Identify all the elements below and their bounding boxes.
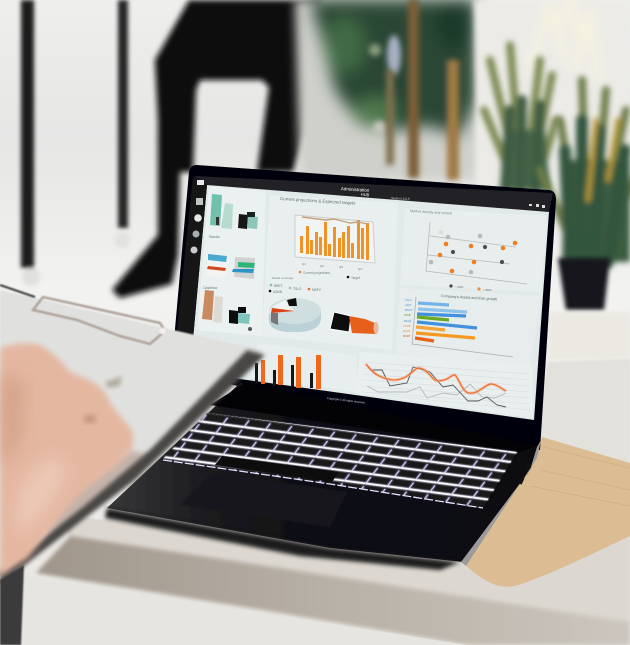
hand	[0, 343, 133, 578]
laptop screen	[176, 176, 553, 420]
chart axis labels: Q3	[339, 265, 343, 269]
3d pie chart	[269, 298, 321, 332]
scatter points orange	[438, 241, 517, 273]
clipboard and hand	[0, 285, 265, 645]
bar labels: ETHR	[403, 329, 410, 333]
gear icon	[248, 327, 252, 331]
chart legend	[299, 271, 360, 280]
clipboard top dark line	[0, 285, 35, 297]
hand base	[0, 343, 133, 578]
bar labels: TSLO	[405, 298, 412, 302]
orange series	[366, 364, 506, 393]
clipboard lower reflection strip	[40, 450, 150, 545]
laptop	[105, 165, 556, 570]
storage label: Stacks	[209, 235, 220, 239]
window poles	[21, 0, 130, 286]
panel: assets horizontal bar chart	[396, 288, 541, 368]
chart axis labels: Q4	[358, 267, 362, 271]
side edge with ports	[461, 440, 541, 566]
panel: storage widgets	[197, 186, 266, 336]
envelope	[463, 437, 630, 587]
teal stacks	[210, 194, 258, 229]
finger crease	[84, 415, 96, 423]
blurred background objects	[21, 0, 630, 360]
right floor strip	[548, 312, 630, 360]
panel: line chart	[356, 352, 533, 418]
clipboard sheet	[0, 290, 262, 575]
hub label: HUB	[361, 192, 370, 197]
desk top surface front	[60, 515, 630, 624]
pale leaves	[530, 0, 598, 80]
clipboard dark edge	[0, 350, 265, 585]
plant backdrop	[295, 0, 476, 180]
grid lines	[362, 362, 530, 410]
bar labels	[403, 298, 413, 338]
plant highlights	[369, 35, 401, 135]
bar labels: STAB	[404, 313, 411, 317]
chart heading: Current projections & Expected targets	[280, 196, 356, 206]
plant pot	[558, 258, 610, 310]
clipboard metal clip	[33, 297, 165, 344]
workflow label: Cashflow	[203, 286, 218, 290]
dark series	[370, 367, 506, 407]
footer copyright: Copyright © All rights reserved	[327, 396, 365, 405]
title bar	[194, 176, 553, 212]
right plant clump two	[540, 80, 630, 262]
panel: lower bars	[250, 343, 358, 392]
lit lower edge	[163, 460, 483, 508]
seated person silhouette	[112, 0, 322, 298]
bar chart heading: Company's Assets and their growth	[441, 294, 497, 301]
spacebar	[215, 456, 339, 482]
bar labels: MURT	[403, 334, 411, 338]
divider labels: Model coverage	[272, 276, 294, 280]
dashboard display	[190, 185, 549, 420]
lower bar chart	[255, 355, 321, 389]
dark foreground pole	[0, 565, 24, 645]
trackpad	[180, 473, 347, 527]
title bar label: Administration	[341, 186, 370, 193]
pie legend: TSLO	[293, 287, 302, 291]
scatter axes	[426, 222, 527, 284]
scatter legend: > 60%	[455, 285, 464, 289]
bar labels: AAVT	[405, 303, 412, 307]
coloured blocks	[207, 254, 255, 279]
scatter points grey	[429, 230, 482, 274]
scatter heading: Market density and control	[410, 209, 452, 216]
orange and black stacks	[202, 290, 250, 324]
chart axis labels: Q1	[302, 262, 306, 266]
orange bar chart	[300, 220, 369, 260]
target line	[302, 217, 367, 224]
floor under desk	[20, 575, 467, 645]
keyboard glow	[162, 413, 517, 508]
bar labels: COOK	[403, 324, 411, 328]
chart legend: Target	[351, 276, 360, 280]
pen tip	[105, 376, 122, 388]
deck shadow edge	[105, 508, 460, 570]
pie legend: AZMN	[273, 290, 283, 294]
panel: current projections	[262, 195, 398, 350]
knuckle shadows	[0, 375, 25, 470]
3d cylinder chart	[330, 312, 378, 334]
right plant clump one	[484, 45, 556, 190]
version label: Version 3.0.5	[391, 196, 410, 201]
desk front face	[36, 536, 630, 645]
backlit keyboard	[162, 413, 517, 508]
scatter legend: > 85%	[483, 288, 492, 292]
clip rivet	[160, 328, 166, 334]
centre plant	[295, 0, 476, 180]
panel: market density scatter	[400, 208, 547, 292]
bar labels: MGUV	[405, 308, 413, 312]
pie legend: BRKT	[274, 284, 283, 288]
lower bezel	[210, 383, 537, 452]
scatter points dark	[451, 245, 504, 264]
hand highlights	[17, 457, 65, 535]
plant trunks	[386, 0, 459, 180]
scatter legend	[449, 284, 492, 292]
envelope creases	[530, 446, 630, 506]
right wall	[474, 0, 630, 220]
pie legend: MSFV	[312, 288, 322, 292]
sidebar icons	[190, 180, 204, 254]
chart legend: Current projections	[303, 271, 330, 275]
chart axis labels	[302, 262, 362, 271]
chart frame	[295, 215, 375, 263]
plant foliage	[310, 0, 476, 135]
bar labels: MKLB	[404, 319, 411, 323]
laptop base deck	[107, 383, 540, 562]
pie legend	[269, 284, 322, 294]
key grid	[162, 413, 517, 508]
horizontal bars	[415, 303, 477, 341]
desk	[20, 359, 630, 645]
window controls	[529, 204, 545, 208]
sidebar	[176, 176, 207, 372]
grey series	[367, 384, 506, 398]
desk top surface right	[530, 359, 630, 480]
chart axis labels: Q2	[320, 264, 324, 268]
laptop lid bezel	[172, 165, 556, 450]
axis	[412, 297, 513, 357]
